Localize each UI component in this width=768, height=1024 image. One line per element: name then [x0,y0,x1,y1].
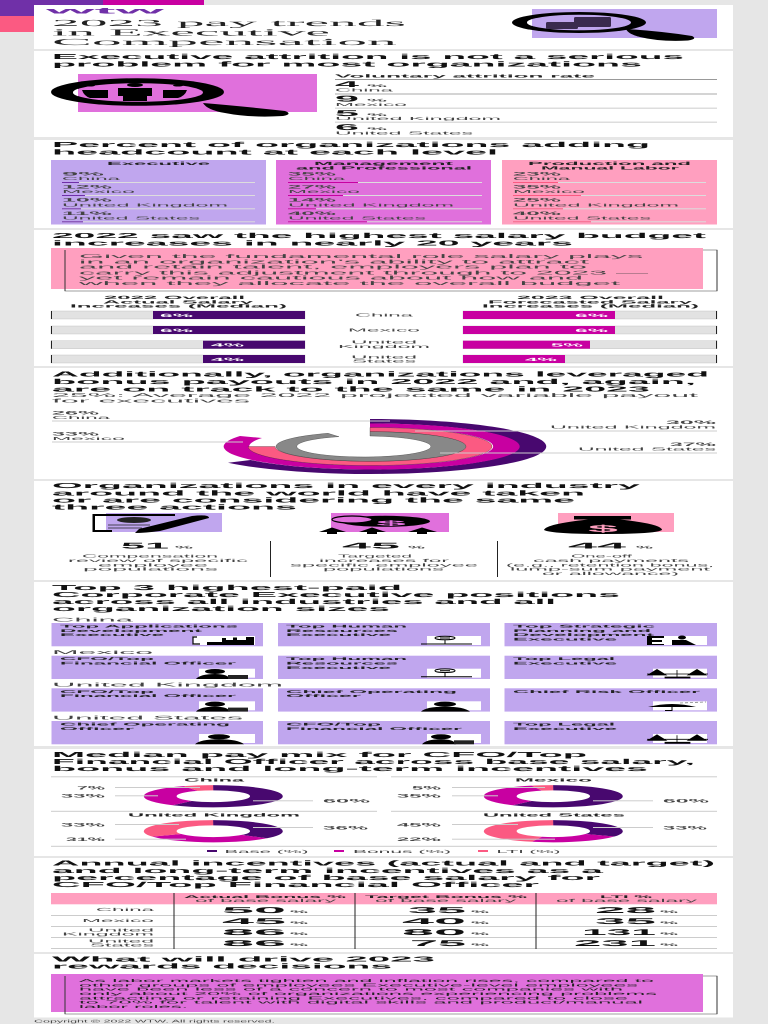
heading: incentives: and long-term incentives as a [52,866,608,875]
text block: voluntary attrition rate: China [335,88,396,93]
card: production and manual labor [502,160,717,224]
card: production and manual labor: Production and [528,161,692,166]
group: United States: Chief Operating [60,722,234,726]
text block: average payout [52,393,701,404]
heading: three actions: or are considering the same [52,495,575,504]
table: Actual Bonus % [184,894,349,899]
heading: attrition: Executive attrition is not a serious [52,52,684,61]
heading: three actions: around the world have taken [52,488,585,497]
card: production and manual labor: 25% [513,198,564,204]
heading: top paid positions: Top 3 highest-paid [52,583,402,592]
action: targeted increases: specific employee [290,563,481,568]
donut: Mexico: 35% [397,794,443,800]
chart labels: bonus payouts by country: Mexico [52,436,128,441]
group: China: Top Strategic [513,624,660,628]
chart: 2022 actual salary increases: Increases (Median) [70,304,289,309]
action: one-off cash payments: lump-sum payment [510,567,714,572]
card: production and manual labor: 40% [513,211,564,217]
table: 80 [402,927,468,937]
heading: incentives [52,859,718,889]
heading: bonus payouts: are on track to the same in 2023 [52,384,650,393]
donut: United States: 33% [663,825,709,831]
table: 86 [222,938,288,948]
panel: executive attrition [34,51,733,137]
heading: top paid positions: organization sizes [52,604,390,613]
panel: bonus payouts [34,368,733,479]
title: Compensation [52,37,400,47]
heading: pay mix: Financial Officer across base salary, [52,757,695,766]
labels: countries: China [355,313,416,318]
card: production and manual labor: China [513,176,573,181]
table: of base salary [375,898,520,903]
donut: Mexico: Mexico [515,777,593,782]
callout: salary role: when they allocate the overall budget [73,281,623,287]
card: management and professional: United Kingdom [288,202,456,208]
heading: bonus payouts: bonus payouts in 2022 and, again, [52,377,696,386]
group: China: Resources [286,628,398,633]
text block: voluntary attrition rate: United Kingdom [335,116,503,121]
donut: United Kingdom: United Kingdom [128,813,300,818]
legend [207,849,563,854]
panel: pay mix [34,749,733,856]
panel: three actions [34,481,733,580]
table: 75 [410,938,468,948]
group: United States: Top Legal [513,722,615,726]
card: executive: Mexico [62,189,138,194]
group: United States: United States [52,715,245,721]
donut: United States: 22% [397,837,443,843]
table: % [290,921,311,925]
card: management and professional: 27% [288,185,339,191]
heading: rewards decisions: rewards decisions [52,962,392,971]
callout: salary role: carry this adjustment through to 2023 — [79,270,652,276]
group: China: Executive [286,632,396,637]
card: executive [51,160,266,224]
heading: attrition: problem for most organizations [52,59,642,68]
table: 40 [402,916,468,926]
group: Mexico: Top Legal [513,656,615,661]
donut: China: 33% [61,794,107,800]
heading: incentives: CFO/Top Financial Officer [52,880,540,889]
group: Mexico: Mexico [52,650,153,656]
labels: countries: Mexico [348,327,423,332]
chart: 2023 forecasted salary increases: Increases (Median) [482,304,701,309]
text block: average payout: for executives [52,398,252,404]
chart: 2022 actual salary increases: Actual Salary [103,299,255,304]
action: one-off cash payments: (e.g., retention bonus, [506,563,714,568]
labels: countries: United [351,340,420,345]
group: United States: Officer [60,726,137,731]
card: executive: 10% [62,198,115,204]
card: management and professional: China [288,176,348,181]
heading: salary budget [52,231,709,247]
heading: bonus payouts [52,369,709,393]
table: 231 [574,938,658,948]
action: one-off cash payments: $ [588,524,620,535]
group: China: China [52,617,133,623]
table: LTI % [600,894,655,899]
legend: LTI (%) [496,849,563,854]
group: Mexico: CFO/Top [60,656,158,661]
action: one-off cash payments: or allowance) [542,571,682,576]
group: Mexico: Executive [513,660,622,666]
card: executive: China [62,176,123,181]
action: one-off cash payments: One-off [571,554,635,559]
callout: salary role: Given the fundamental role salary plays [79,254,645,260]
card: management and professional: Mexico [288,189,363,194]
card: management and professional: 40% [288,211,339,217]
action: targeted increases: populations [323,567,448,572]
legend: Bonus (%) [353,849,454,854]
group: United States: Executive [513,726,622,731]
card: executive: United Kingdom [62,202,230,208]
table: % [471,921,492,925]
card: management and professional: 35% [288,171,339,177]
title: in Executive [52,28,330,38]
heading: top paid positions: across all industries and all [52,597,556,606]
heading: pay mix: bonus and long-term incentives [52,764,648,773]
table: 28 [595,905,658,915]
text block: voluntary attrition rate [335,74,717,136]
heading: rewards decisions: What will drive 2023 [52,955,435,964]
chart: radial bars [224,419,546,474]
donut: United States: 45% [397,822,443,828]
donut: United States [397,813,709,843]
table: Kingdom [62,932,156,937]
chart labels: bonus payouts by country: 30% [666,420,719,426]
action: targeted increases: Targeted [338,554,414,559]
table: % [471,932,492,936]
group: United States: Financial Officer [286,726,465,731]
text block: voluntary attrition rate: 5 [335,108,361,118]
group: Mexico: Top Human [286,656,411,661]
chart: 2023 forecasted salary increases: Forecasted Salary [488,299,694,304]
chart: 2022 actual salary increases: 6% [160,328,193,333]
action: compensation review: 51 [121,541,171,551]
table: % [660,921,681,925]
card: production and manual labor: United States [513,216,655,221]
table: of base salary [195,898,340,903]
chart labels: bonus payouts by country: 37% [670,442,719,448]
table: of base salary [556,898,701,903]
heading: three actions: Organizations in every industry [52,481,640,490]
action: compensation review: populations [83,567,223,572]
action: targeted increases: $ [376,520,407,528]
title [52,18,409,47]
panel: 2023 rewards decisions [34,954,733,1018]
action: targeted increases [290,513,481,572]
callout: labor markets: only about 20% of organizations experiencing problems [79,991,657,996]
text block: voluntary attrition rate: Voluntary attrition rate [335,74,597,78]
heading: headcount: Percent of organizations adding [52,140,650,149]
callout: labor markets: labor roles. [79,1004,188,1009]
heading: three actions: three actions [52,502,297,511]
card: production and manual labor: 23% [513,171,564,177]
group: China: Executive [513,636,622,641]
table: 35 [408,905,468,915]
heading: headcount [52,140,650,157]
card: production and manual labor: Manual Labor [541,165,680,170]
table: % [660,932,681,936]
card: executive: 9% [62,171,107,177]
chart: 2023 forecasted salary increases: 5% [551,343,583,348]
heading: top paid positions [52,583,620,613]
chart labels: bonus payouts by country: 26% [52,410,102,416]
panel: incentives table [34,858,733,952]
text block: voluntary attrition rate: % [367,113,391,117]
action: one-off cash payments [506,513,714,576]
chart: 2023 forecasted salary increases [463,295,717,363]
card: production and manual labor: 35% [513,185,564,191]
callout: labor markets: As labor markets tighten and inflation rises, compared to [79,978,658,983]
table: % [290,932,311,936]
action: compensation review: review of specific [68,558,252,563]
group: United Kingdom [52,683,717,712]
donut: United States: United States [483,813,627,818]
text block: voluntary attrition rate: United States [335,130,477,136]
group: United Kingdom: Financial Officer [60,693,239,698]
group: United Kingdom: CFO/Top [60,689,158,694]
table: United [88,927,157,932]
table: % [290,943,311,947]
callout: labor markets [51,974,718,1014]
heading: three actions [52,481,640,511]
chart: 2022 actual salary increases: 4% [211,357,244,362]
callout: salary role: yet remain cautious about how and [79,276,583,282]
text block: voluntary attrition rate: % [367,84,391,88]
action: targeted increases: increases for [319,558,452,563]
action: compensation review: % [175,546,196,550]
group: China: Development [60,628,206,633]
labels: countries: States [352,358,420,364]
donut: China: 7% [77,785,107,791]
divider [270,541,271,577]
callout: labor markets: other groups of employees Executive-level employees [79,982,638,987]
heading: salary budget: increases in nearly 20 years [52,238,573,247]
group: United States: CFO/Top [286,722,385,726]
chart: 2023 forecasted salary increases: 2023 Overall [517,295,664,300]
donut: United Kingdom [61,813,370,843]
table: % [471,910,492,914]
table: % [471,943,492,947]
decorative corner colour blocks [0,0,204,32]
donut: China: China [184,777,246,782]
table: Mexico [82,918,157,923]
chart labels: bonus payouts by country: China [52,415,113,420]
text block: voluntary attrition rate: 6 [335,122,361,132]
callout: labor markets: have been less of a concern to most companies with [79,987,627,992]
group: Mexico: Financial Officer [60,660,239,666]
chart: 2022 actual salary increases: 2022 Overall [104,295,245,300]
group: Mexico [52,650,717,679]
chart labels: bonus payouts by country: 33% [52,431,102,437]
text block: voluntary attrition rate: 4 [335,79,361,89]
group: Mexico: Executive [286,665,396,670]
callout: salary role: in an organization’s ability to attract [79,259,592,265]
action: targeted increases: 45 [342,541,402,551]
donut: China: 60% [323,798,373,804]
group: China [52,617,717,646]
panel: salary budget [34,230,733,366]
panel: header [34,5,733,49]
callout: labor markets: to 70% for talent with digital skills and product/manual [79,1000,643,1005]
chart: 2023 forecasted salary increases: 4% [525,357,557,362]
heading: attrition [52,52,684,68]
text block: voluntary attrition rate: % [367,99,391,103]
group: China: Development [513,632,658,637]
table: 45 [222,916,288,926]
donut: Mexico: 60% [663,798,712,804]
chart: 2023 forecasted salary increases: 6% [575,313,608,318]
donut: United Kingdom: 36% [323,825,370,831]
heading: pay mix [52,750,695,773]
text block: voluntary attrition rate: 9 [335,94,361,104]
labels: countries: Kingdom [338,344,432,349]
heading: bonus payouts: Additionally, organizations leveraged [52,369,709,378]
labels: countries [338,313,432,364]
footer: copyright: Copyright © 2022 WTW. All rights reserved. [34,1018,275,1024]
table [51,893,717,949]
chart: 2022 actual salary increases: 6% [160,313,193,318]
donut: Mexico: 5% [412,785,443,791]
table: 35 [595,916,658,926]
icon: magnifier over coins [512,9,717,41]
action: targeted increases: % [408,546,428,550]
chart: 2022 actual salary increases [51,295,305,363]
labels: countries: United [351,354,420,359]
logo: wtw: wtw [39,6,167,16]
group: United Kingdom: Chief Operating [286,689,461,694]
panel: headcount [34,140,733,228]
callout: labor markets: attracting or retaining Executives, compared to close [79,995,632,1000]
group: China: Planning and [513,628,654,633]
heading: incentives: percentage of base salary for [52,873,601,882]
table: 86 [222,927,288,937]
title: 2023 pay trends [52,18,409,28]
donut: China [61,777,373,805]
legend: Base (%) [224,849,311,854]
callout: salary role [51,248,718,291]
group: China: Executive [60,632,169,637]
donut: United Kingdom: 33% [61,822,107,828]
card: executive: 12% [62,185,115,191]
heading: rewards decisions [52,955,435,971]
table: % [660,910,681,914]
action: compensation review [68,513,252,572]
heading: headcount: headcount at each level [52,148,498,157]
action: one-off cash payments: % [636,546,656,550]
donut: Mexico [397,777,712,805]
table: States [90,943,158,948]
card: management and professional: United States [288,216,430,221]
panel: top paid positions [34,582,733,746]
card: management and professional: and Professional [296,165,472,170]
heading: top paid positions: Corporate Executive positions [52,590,620,599]
table: 131 [582,927,658,937]
group: United Kingdom: Chief Risk Officer [513,689,703,694]
table: % [290,910,311,914]
card: management and professional [276,160,491,224]
card: production and manual labor: Mexico [513,189,588,194]
donut: United Kingdom: 31% [66,837,107,843]
chart labels: bonus payouts by country: United States [578,447,720,452]
table: China [96,907,157,912]
heading: salary budget: 2022 saw the highest salary budget [52,231,709,240]
chart: 2022 actual salary increases: 4% [211,343,244,348]
action: one-off cash payments: 44 [568,541,628,551]
group: United Kingdom: United Kingdom [52,683,286,689]
heading: incentives: Annual incentives (actual and target) [52,859,718,868]
action: one-off cash payments: cash payments [533,558,693,563]
table: Target Bonus % [365,894,530,899]
card: management and professional: Management [314,161,455,166]
table: United [88,938,157,943]
text block: voluntary attrition rate: % [367,127,391,131]
chart labels: bonus payouts by country [52,410,720,454]
chart: 2023 forecasted salary increases: 6% [575,328,608,333]
group: United Kingdom: Officer [286,693,364,698]
card: production and manual labor: United Kingdom [513,202,681,208]
text block: average payout: 25%: Average 2022 projected variable payout [52,393,701,399]
group: China: Top Applications [60,624,238,628]
card: executive: 11% [62,211,115,217]
card: management and professional: 14% [288,198,339,204]
table: 50 [222,905,288,915]
action: compensation review: Compensation [82,554,221,559]
icon: magnifier over people [51,74,317,117]
group: United States [52,715,717,744]
card: executive: United States [62,216,204,221]
text block: voluntary attrition rate: Mexico [335,102,410,107]
table: % [660,943,681,947]
divider [497,541,498,577]
group: China: Top Human [286,624,411,628]
heading: pay mix: Median pay mix for CFO/Top [52,750,590,759]
chart labels: bonus payouts by country: United Kingdom [550,425,718,430]
group: Mexico: Resources [286,660,398,666]
action: compensation review: employee [98,563,211,568]
callout: salary role: and retain talent, employers plan to [79,265,587,271]
card: executive: Executive [107,161,212,166]
